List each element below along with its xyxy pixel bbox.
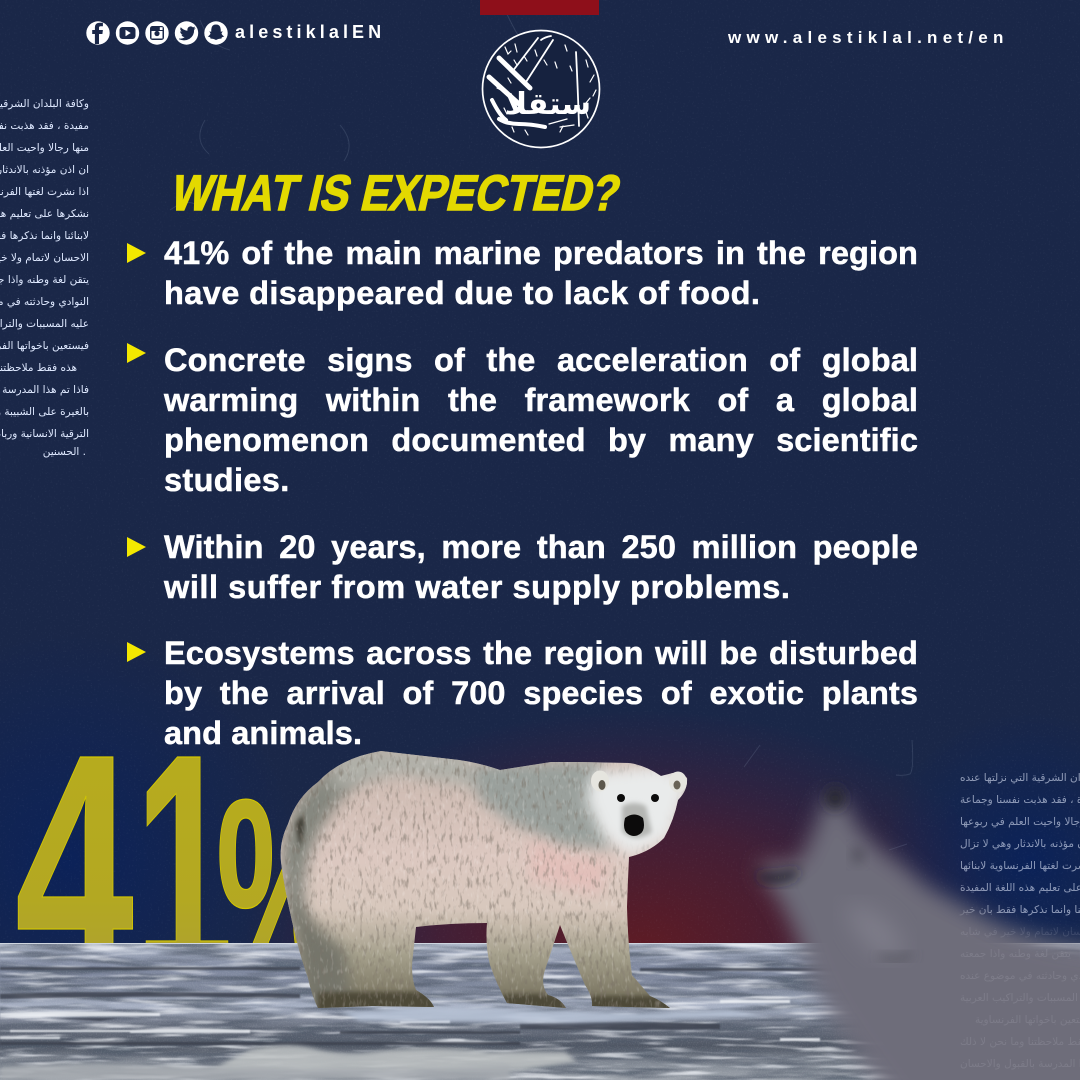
fur texture — [281, 752, 686, 1008]
blurred wolf foreground: يتقن لغة وطنه واذا جمعته — [960, 948, 1071, 960]
icon: snapchat — [204, 21, 228, 45]
bullet 4: Ecosystems across the region will be disturbed — [164, 635, 918, 671]
bullet 3: will suffer from water supply problems. — [164, 569, 790, 605]
polar bear illustration — [280, 751, 688, 1008]
rear leg shade — [286, 888, 352, 1006]
icon: youtube — [116, 21, 139, 45]
bullet 3 — [127, 529, 918, 605]
bullet 2: phenomenon documented by many scientific — [164, 422, 918, 458]
bullet 4 — [127, 635, 918, 751]
icon: bear eyes and nose — [617, 794, 659, 836]
bullet 1: have disappeared due to lack of food. — [164, 275, 760, 311]
muzzle — [622, 803, 652, 838]
bullet 2: warming within the framework of a global — [164, 382, 918, 418]
pink chest — [537, 838, 588, 876]
bullet 2: Concrete signs of the acceleration of global — [164, 342, 918, 378]
left Arabic text column: الحسنين . — [43, 446, 86, 458]
top red tab — [480, 0, 599, 15]
bullet 1: 41% of the main marine predators in the region — [164, 235, 918, 271]
head — [586, 766, 690, 856]
feet — [318, 992, 672, 1012]
rump shading — [280, 765, 361, 926]
bullet 4: by the arrival of 700 species of exotic plants — [164, 675, 918, 711]
icon: twitter — [175, 21, 198, 45]
bullet 3: Within 20 years, more than 250 million people — [164, 529, 918, 565]
handle text: alestiklalEN — [235, 22, 385, 42]
icon: facebook — [86, 21, 110, 45]
website url: www.alestiklal.net/en — [728, 28, 1009, 47]
bullet 2: studies. — [164, 462, 290, 498]
blurred wolf foreground — [752, 788, 1080, 1080]
icon: bear ears — [591, 770, 687, 792]
bullet 1 — [127, 235, 918, 311]
left Arabic text column — [0, 98, 89, 458]
body text bullets — [127, 235, 918, 751]
title: WHAT IS EXPECTED? — [166, 165, 626, 221]
bullet 4: and animals. — [164, 715, 362, 751]
icon: instagram — [145, 21, 169, 45]
logo: Al-Estiklal calligraphic seal — [482, 30, 600, 148]
ground: ice sheet — [0, 943, 1080, 1080]
big 41% figure — [15, 745, 300, 945]
social icons row — [86, 21, 228, 45]
logo: Al-Estiklal calligraphic seal: ستقلا — [505, 87, 591, 122]
shoulder grey fur — [470, 760, 612, 850]
bullet 2 — [127, 342, 918, 498]
